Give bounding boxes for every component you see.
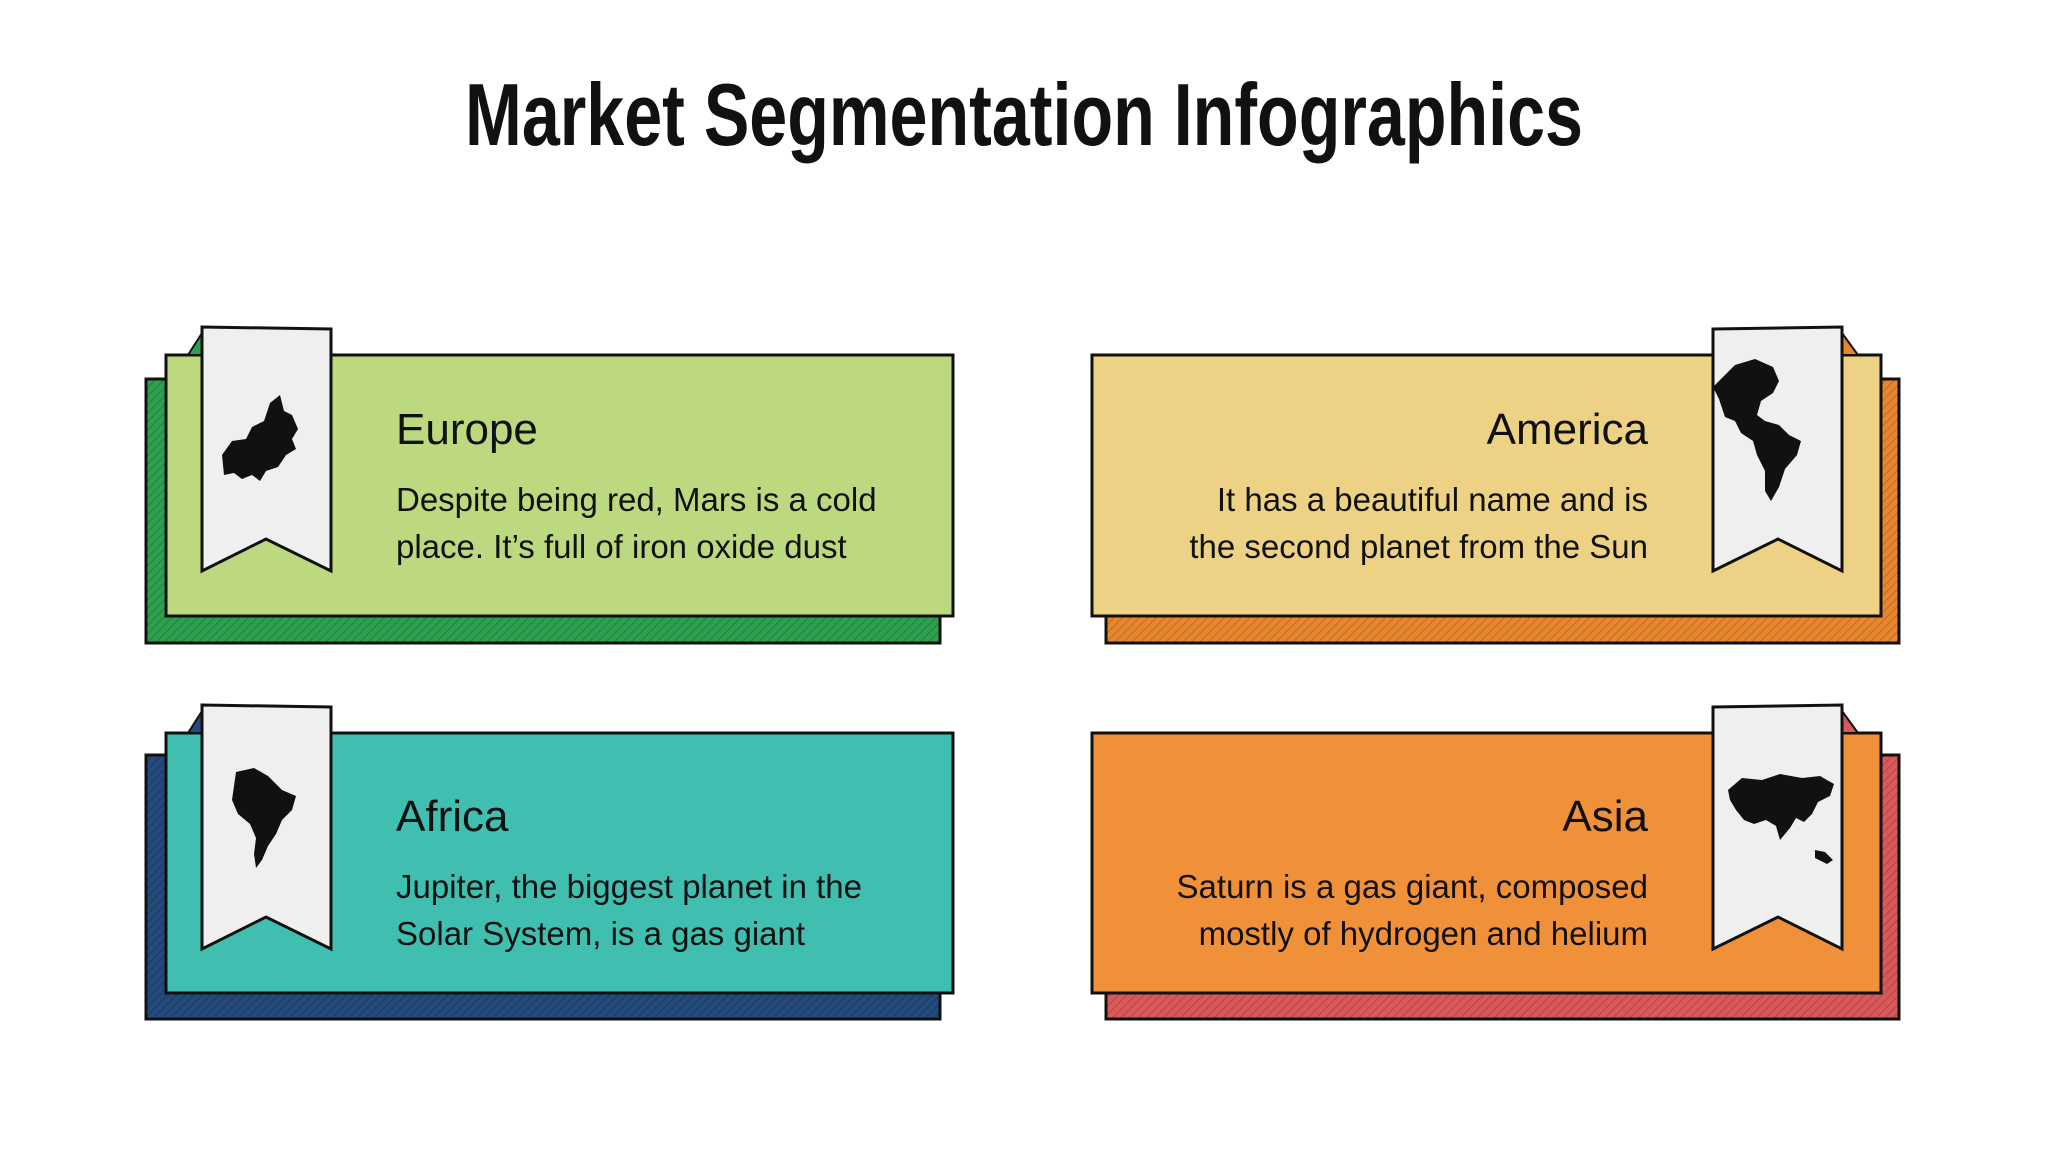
heading: America: America (1487, 405, 1649, 454)
text: Asia body: Saturn is a gas giant, composed (1177, 868, 1648, 905)
text: Europe body: Despite being red, Mars is a cold (396, 481, 877, 518)
text: America body: It has a beautiful name and is (1217, 481, 1648, 518)
icon: bookmark with Africa map (202, 705, 331, 949)
heading: Europe: Europe (396, 405, 538, 454)
heading: Asia: Asia (1562, 792, 1649, 841)
panel: Africa: Solar System, is a gas giant (396, 915, 805, 952)
panel: Africa (146, 705, 953, 1019)
panel: Europe: place. It’s full of iron oxide dust (396, 528, 847, 565)
title: Market Segmentation Infographics (465, 65, 1583, 164)
panel: Asia: mostly of hydrogen and helium (1199, 915, 1648, 952)
icon: bookmark with Europe map (202, 327, 331, 571)
panel: America (1092, 327, 1899, 643)
text: Africa body: Jupiter, the biggest planet in the (396, 868, 862, 905)
icon: bookmark with America map (1713, 327, 1842, 571)
panel: America: the second planet from the Sun (1189, 528, 1648, 565)
icon: bookmark with Asia map (1713, 705, 1842, 949)
panel: Asia (1092, 705, 1899, 1019)
heading: Africa: Africa (396, 792, 509, 841)
panel: Europe (146, 327, 953, 643)
